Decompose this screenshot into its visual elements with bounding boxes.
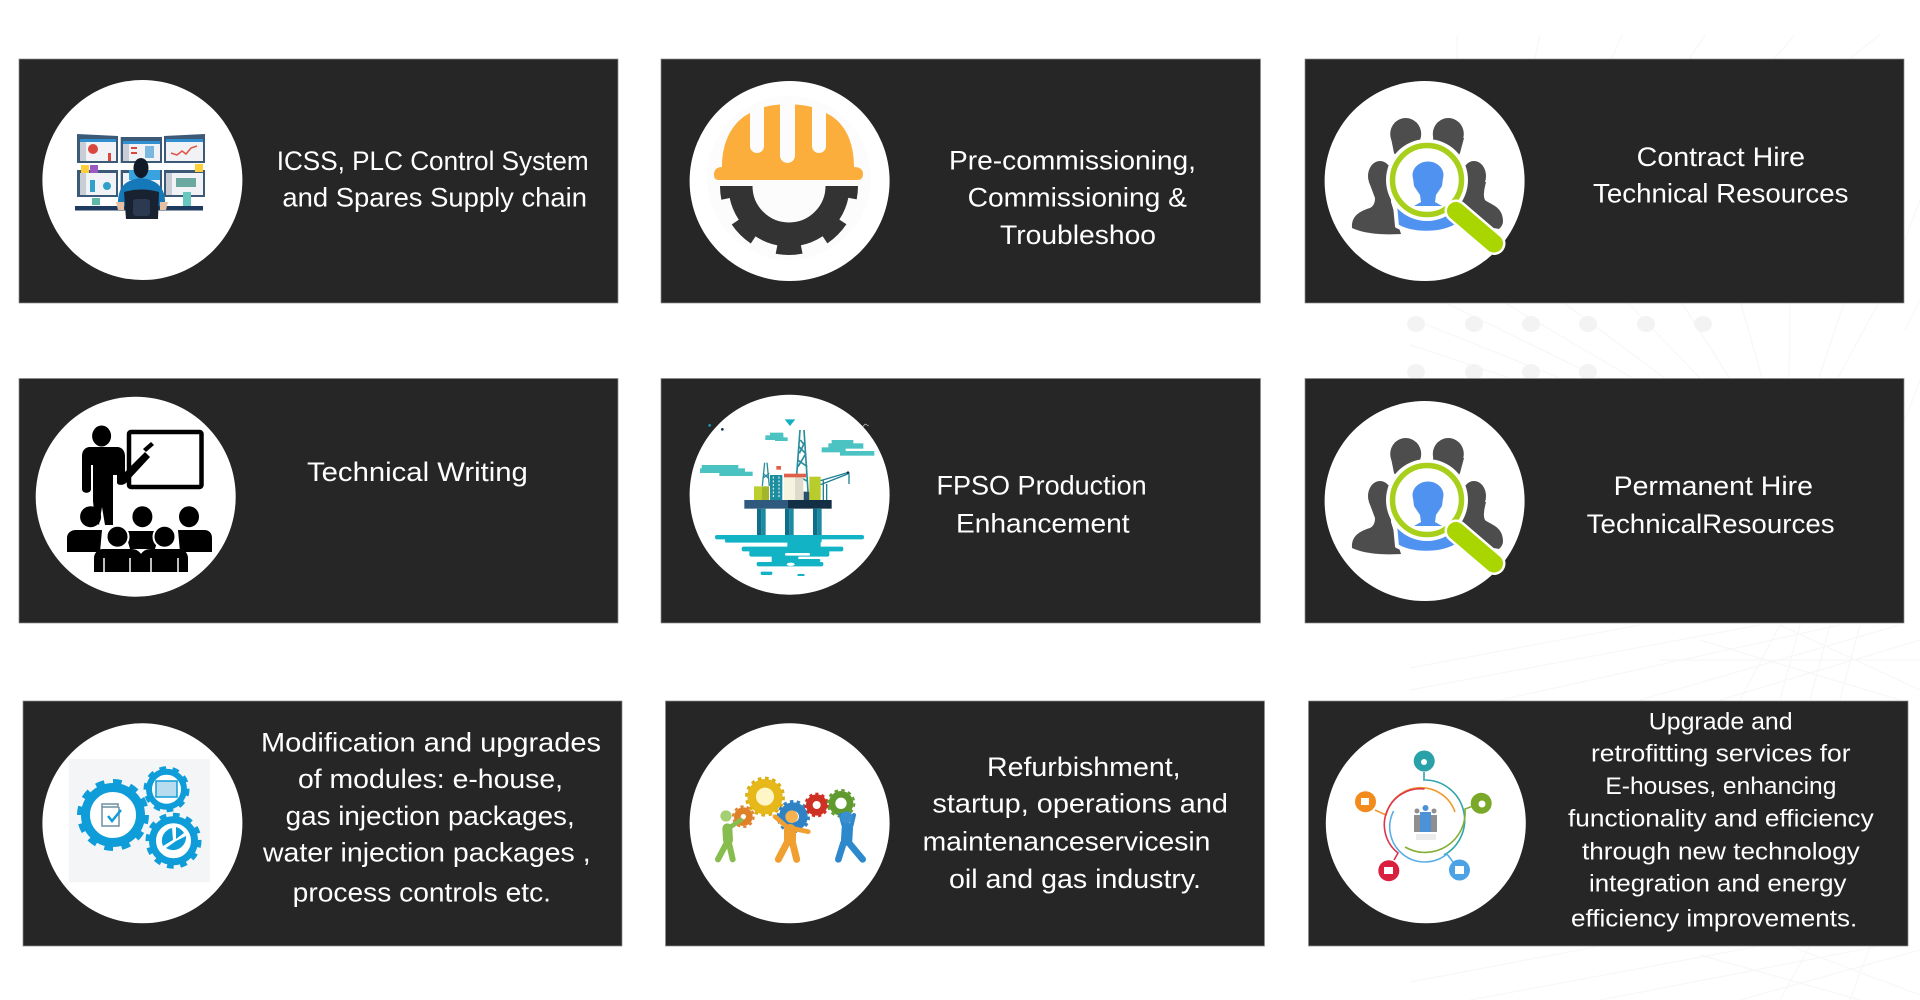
text: Refurbishment, xyxy=(987,752,1181,782)
text: gas injection packages, xyxy=(286,801,575,831)
panel: Refurbishment xyxy=(666,701,1264,946)
text: Commissioning & xyxy=(968,183,1187,213)
panel background xyxy=(1305,378,1904,623)
panel: Upgrade and retrofitting xyxy=(1308,701,1908,946)
text xyxy=(1587,471,1835,539)
text: of modules: e-house, xyxy=(298,764,563,794)
text: Troubleshoo xyxy=(1000,220,1156,250)
text: startup, operations and xyxy=(932,789,1228,819)
text xyxy=(1593,142,1848,209)
icon circle: blue gears xyxy=(42,723,242,923)
text: integration and energy xyxy=(1589,871,1847,898)
text xyxy=(923,752,1228,894)
text: Pre-commissioning, xyxy=(949,145,1196,175)
text: Contract Hire xyxy=(1637,142,1805,172)
panel: Pre-commissioning xyxy=(661,59,1260,303)
panel: Permanent Hire xyxy=(1305,378,1904,623)
icon circle: helmet and gear xyxy=(690,81,890,281)
text: TechnicalResources xyxy=(1587,509,1835,539)
panel background xyxy=(23,701,622,946)
icon circle: hub diagram xyxy=(1326,723,1526,923)
text: maintenanceservicesin xyxy=(923,827,1210,857)
panel background xyxy=(19,59,618,303)
text: retrofitting services for xyxy=(1591,741,1850,768)
text: through new technology xyxy=(1582,838,1860,865)
panel background xyxy=(661,378,1260,623)
text: E-houses, enhancing xyxy=(1605,773,1836,800)
text xyxy=(936,471,1147,539)
text: Technical Resources xyxy=(1593,179,1848,209)
panel: ICSS PLC xyxy=(19,59,618,303)
text xyxy=(277,146,589,213)
panel background xyxy=(19,378,618,623)
text: process controls etc. xyxy=(293,878,551,908)
icon circle: control room operator xyxy=(42,80,242,280)
panel: Contract Hire xyxy=(1305,59,1904,303)
panel background xyxy=(661,59,1260,303)
panel: Modification xyxy=(23,701,622,946)
text: Permanent Hire xyxy=(1614,471,1813,501)
text: efficiency improvements. xyxy=(1571,906,1857,933)
text: oil and gas industry. xyxy=(949,864,1201,894)
text: water injection packages , xyxy=(262,838,591,868)
text xyxy=(949,145,1196,250)
background watermark xyxy=(1407,35,1920,1000)
text: functionality and efficiency xyxy=(1568,806,1875,833)
icon circle: team lifting gears xyxy=(690,723,890,923)
panel: FPSO xyxy=(661,378,1260,623)
icon circle: people search xyxy=(1325,81,1525,281)
icon circle: offshore rig xyxy=(690,395,890,595)
panel: Technical Writing xyxy=(19,378,618,623)
text: ICSS, PLC Control System xyxy=(277,146,589,176)
text: and Spares Supply chain xyxy=(282,183,587,213)
panel background xyxy=(1308,701,1908,946)
text: Upgrade and xyxy=(1649,708,1793,735)
text: Technical Writing xyxy=(307,457,528,487)
text xyxy=(1568,708,1875,933)
panel background xyxy=(666,701,1264,946)
icon circle: people search xyxy=(1325,401,1525,601)
text xyxy=(261,728,601,908)
text: FPSO Production xyxy=(936,471,1147,501)
text: Modification and upgrades xyxy=(261,728,601,758)
text: Enhancement xyxy=(956,509,1130,539)
icon circle: presenter and audience xyxy=(36,397,236,597)
panel background xyxy=(1305,59,1904,303)
